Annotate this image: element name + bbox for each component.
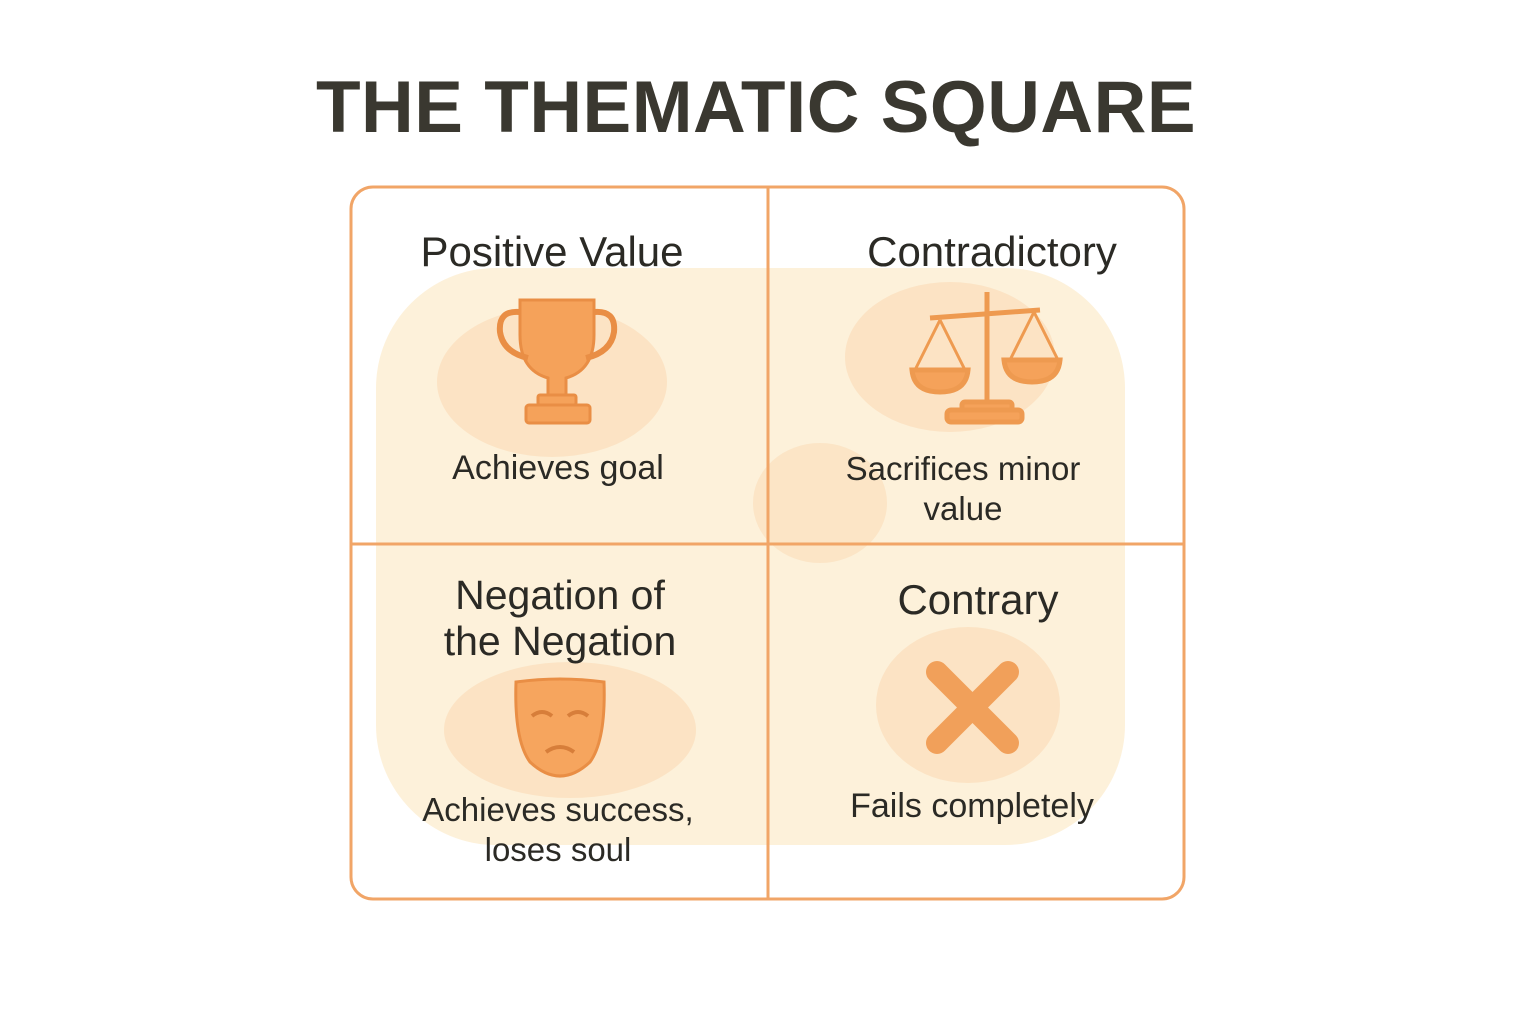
label: Achieves success, loses soul: Achieves success, xyxy=(422,791,694,828)
heading: Contradictory: Contradictory xyxy=(867,228,1117,275)
icon: X xyxy=(937,672,1008,743)
label: Achieves goal: Achieves goal xyxy=(452,449,664,487)
heading: Negation of the Negation xyxy=(444,572,676,664)
icon: mask xyxy=(516,679,604,776)
heading: Negation of the Negation: the Negation xyxy=(444,618,676,664)
soft circles xyxy=(437,282,1060,798)
label: Sacrifices minor value: Sacrifices minor xyxy=(846,450,1080,487)
label: Achieves success, loses soul: loses soul xyxy=(485,831,631,868)
label: Fails completely: Fails completely xyxy=(850,787,1094,825)
icon: trophy xyxy=(500,300,614,423)
label: Achieves success, loses soul xyxy=(422,791,694,868)
label: Sacrifices minor value xyxy=(846,450,1080,527)
label: Sacrifices minor value: value xyxy=(924,490,1002,527)
background blob xyxy=(376,268,1125,845)
grid frame xyxy=(351,187,1184,899)
heading: Negation of the Negation: Negation of xyxy=(455,572,665,618)
heading: Positive Value: Positive Value xyxy=(420,228,684,275)
icon: scales xyxy=(912,292,1060,422)
heading: Contrary: Contrary xyxy=(897,576,1059,623)
title: THE THEMATIC SQUARE xyxy=(316,67,1196,148)
